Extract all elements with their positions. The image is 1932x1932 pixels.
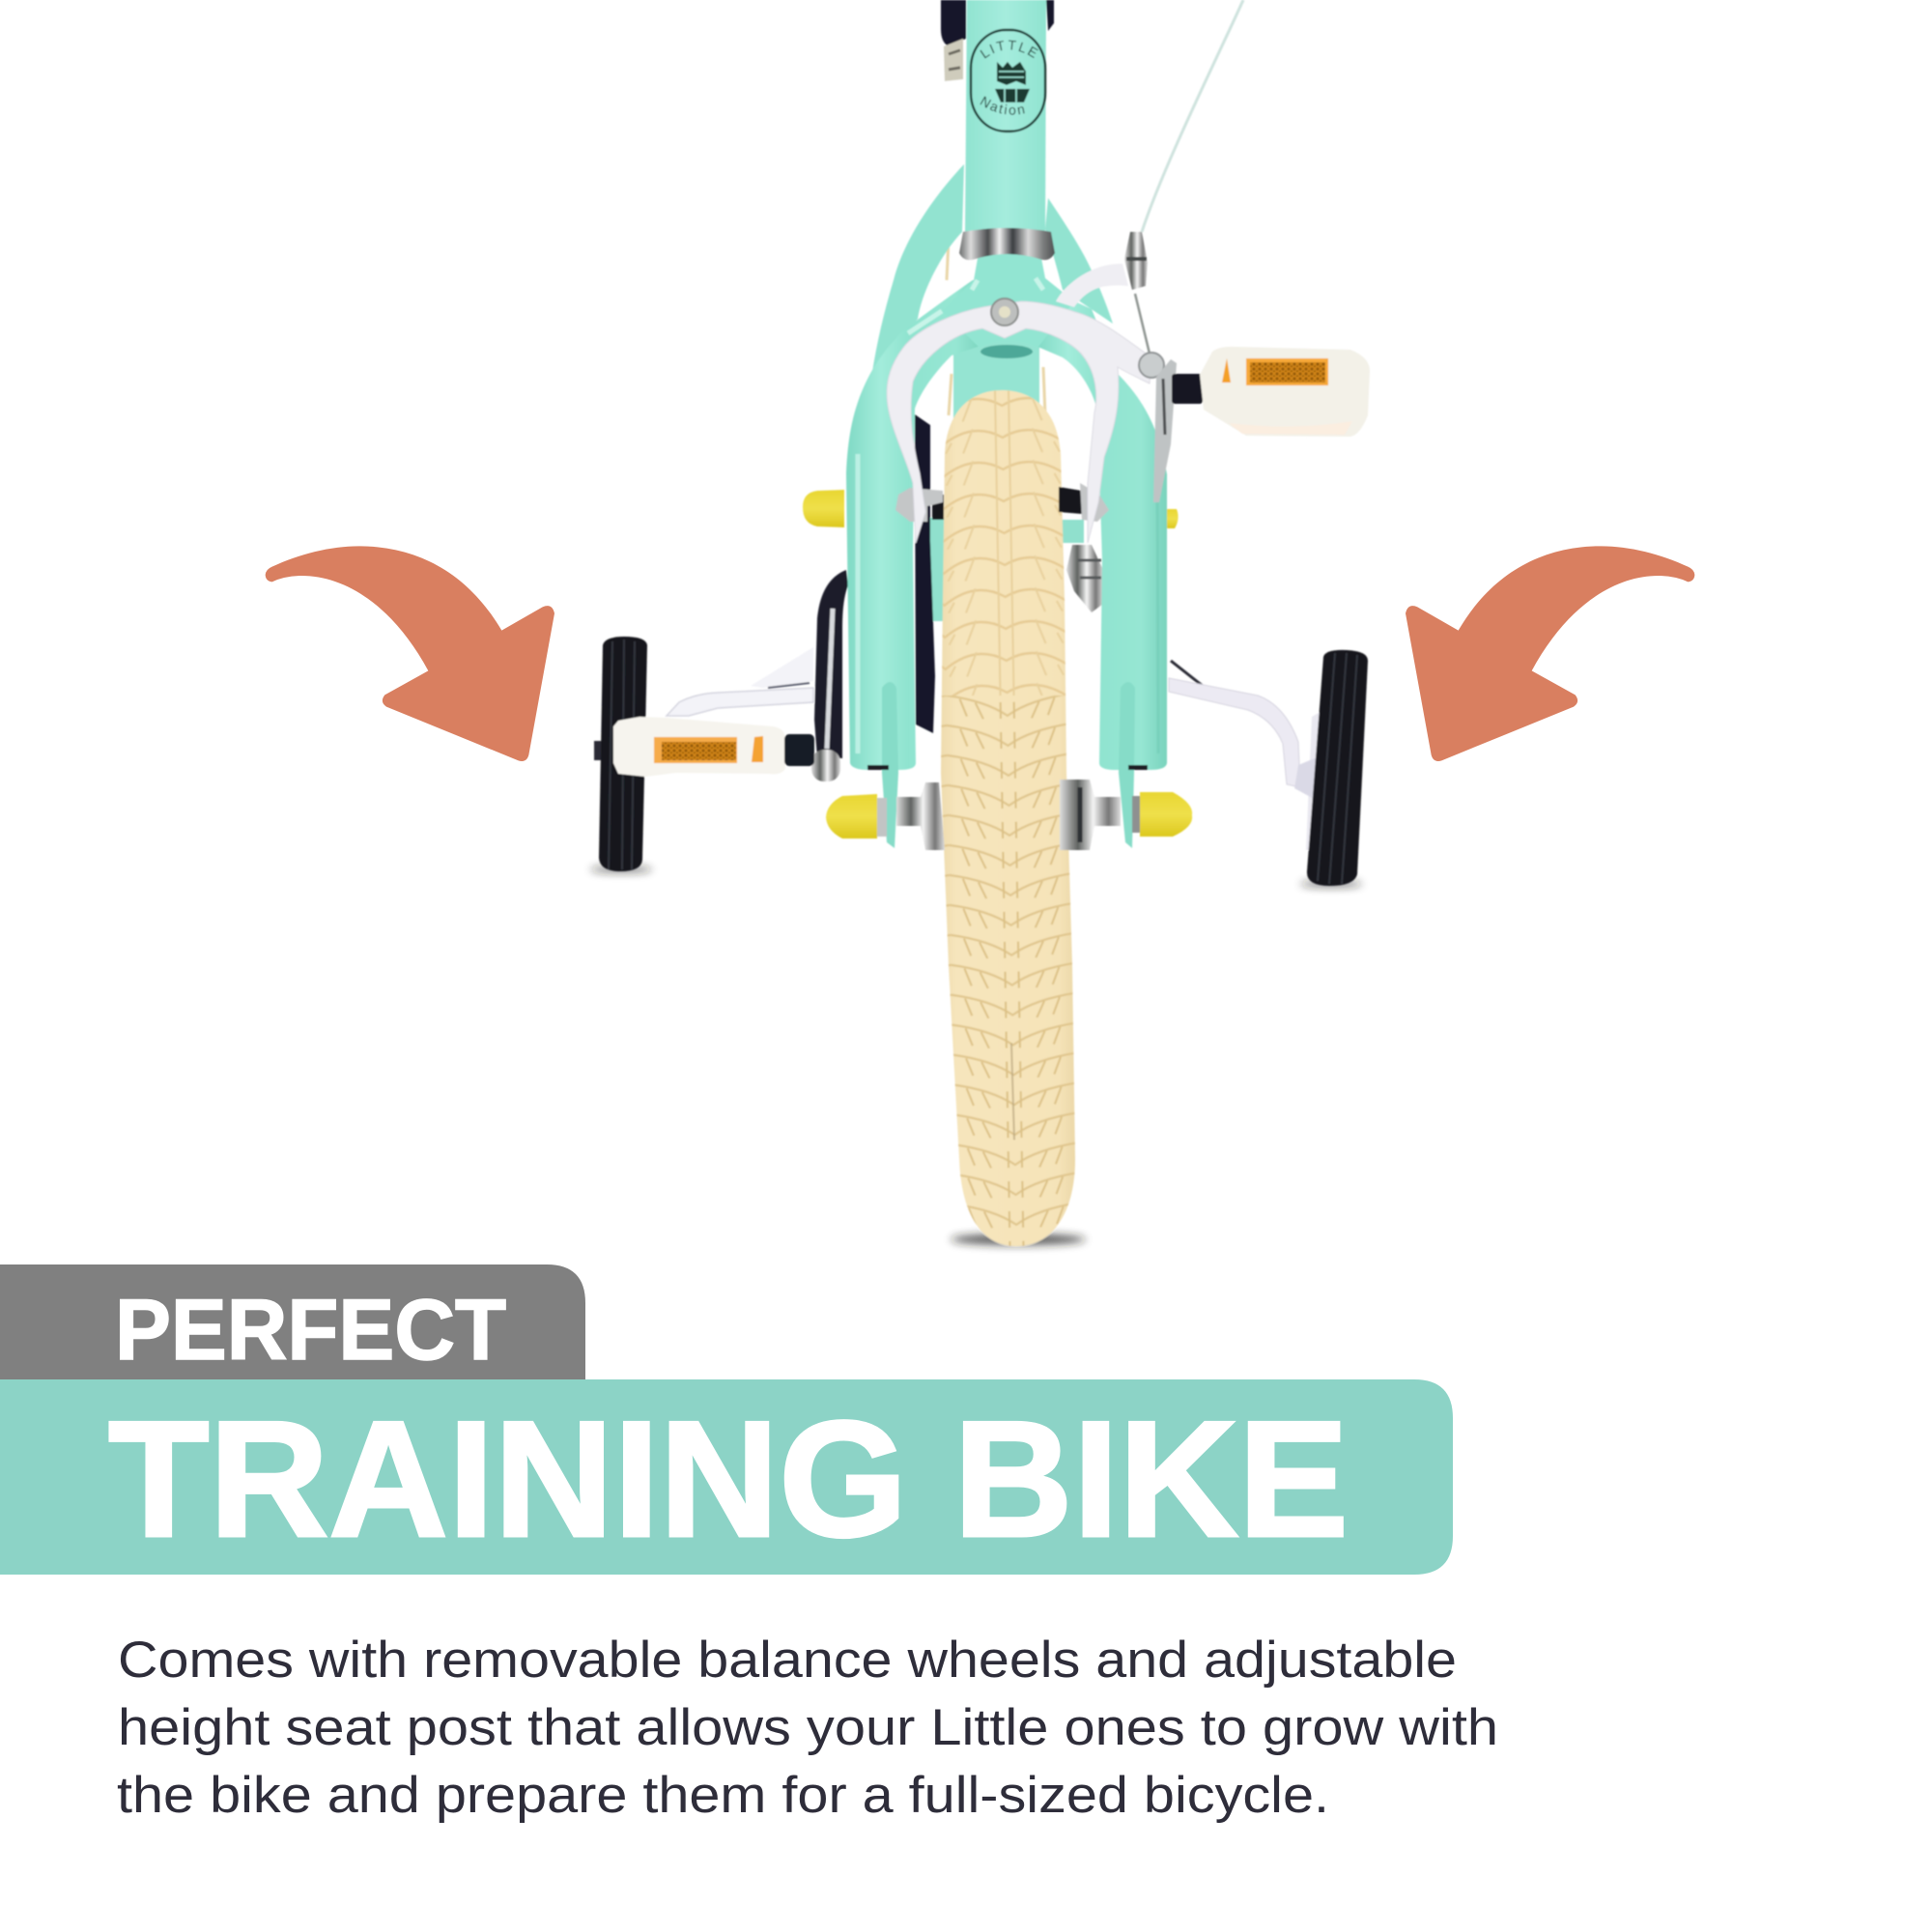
description text: Comes with removable balance wheels and adjustable xyxy=(118,1632,1457,1689)
right training wheel xyxy=(1307,650,1368,886)
right axle xyxy=(1060,780,1192,850)
logo badge xyxy=(968,27,1047,133)
arrow: left training wheel pointer xyxy=(266,546,554,761)
right pedal xyxy=(1172,347,1370,437)
left pedal xyxy=(613,717,814,777)
logo badge: Nation xyxy=(980,96,1026,116)
axle and pedal backing hardware xyxy=(803,414,1179,733)
steerer opening xyxy=(980,345,1033,358)
description text: the bike and prepare them for a full-sized bicycle. xyxy=(117,1767,1329,1824)
description text: height seat post that allows your Little ones to grow with xyxy=(118,1699,1498,1756)
seat post and saddle clamp xyxy=(941,0,1054,81)
right fork blade and crown xyxy=(1036,277,1167,770)
training wheel bracket left xyxy=(667,647,813,716)
brake pivot xyxy=(1139,353,1177,502)
lower teal bridge behind tyre xyxy=(930,518,1084,621)
heading banner: training bike xyxy=(0,1379,1453,1575)
description text xyxy=(117,1632,1498,1824)
left fork blade and crown xyxy=(846,280,983,770)
heading tab: perfect xyxy=(0,1264,585,1379)
rear tyre slivers xyxy=(947,217,1045,415)
cable xyxy=(1142,0,1243,232)
head tube xyxy=(965,0,1046,237)
headset chrome collar xyxy=(959,228,1055,260)
steerer tube behind tyre xyxy=(953,328,1039,425)
training wheel bracket right xyxy=(1169,661,1323,850)
ground shadows xyxy=(590,867,1362,1245)
left axle xyxy=(826,782,945,850)
tyre xyxy=(941,390,1075,1246)
brake straddle arm and adjuster xyxy=(1056,232,1150,354)
arrow: right training wheel pointer xyxy=(1406,546,1694,761)
brake pads and calipers hardware xyxy=(895,483,1109,522)
rear frame tubes xyxy=(872,164,1113,372)
left training wheel xyxy=(594,637,647,871)
fork dropouts xyxy=(867,682,1148,848)
heading words: TRAINING BIKE: TRAINING BIKE xyxy=(108,1387,1349,1572)
bicycle front view xyxy=(587,0,1370,1252)
fork crown xyxy=(942,253,1074,348)
brake caliper arch xyxy=(887,301,1151,543)
caliper centre bolt xyxy=(991,298,1018,326)
heading word: PERFECT: PERFECT xyxy=(115,1281,506,1378)
logo badge: LITTLE xyxy=(980,39,1039,59)
left crank arm xyxy=(811,570,848,781)
crown highlights xyxy=(908,278,1043,333)
